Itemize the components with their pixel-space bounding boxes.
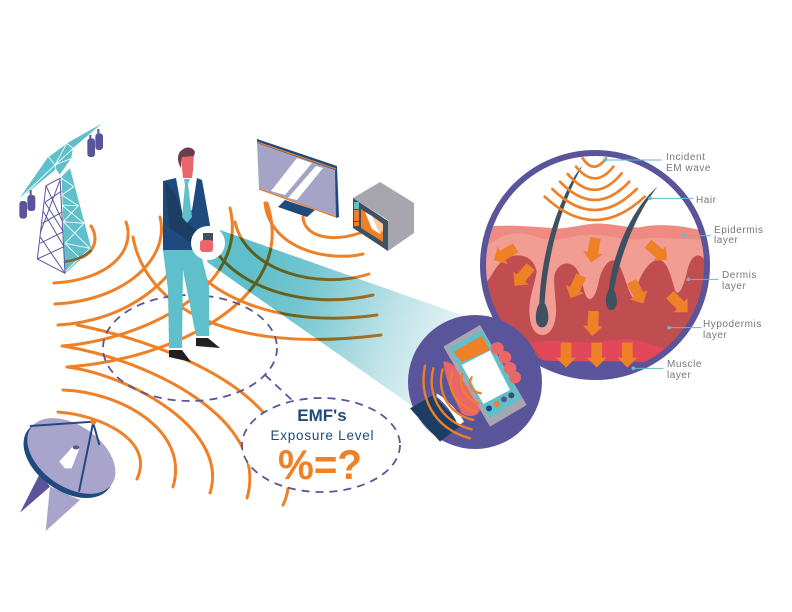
penetration arrows xyxy=(489,236,695,368)
muscle xyxy=(530,339,667,363)
insulators xyxy=(19,129,103,219)
skin labels: layer xyxy=(714,235,739,246)
skin labels: Dermis xyxy=(722,270,757,281)
skin labels: layer xyxy=(722,281,747,292)
fingers xyxy=(491,342,521,383)
callout formula: %=? xyxy=(278,441,362,488)
skin labels: Hypodermis xyxy=(703,319,762,330)
phone xyxy=(443,325,527,427)
hair follicle xyxy=(529,263,556,335)
skin labels: Hair xyxy=(696,195,717,206)
shoes xyxy=(169,350,191,362)
tower body xyxy=(62,168,92,273)
incident wave xyxy=(545,158,645,220)
monitor xyxy=(257,139,339,218)
arm xyxy=(410,395,462,442)
callout heading: EMF's xyxy=(297,406,347,425)
label leaders xyxy=(604,159,718,370)
dashed exposure zone xyxy=(103,295,277,401)
dashed connector xyxy=(265,375,293,401)
lower layer xyxy=(542,360,645,374)
callout subheading: Exposure Level xyxy=(270,428,374,443)
EM wave arcs xyxy=(54,203,381,505)
skin labels: Muscle xyxy=(667,359,702,370)
skin labels xyxy=(666,152,763,381)
trousers xyxy=(163,250,209,348)
head xyxy=(182,153,194,178)
EMF exposure callout xyxy=(242,398,400,492)
tie xyxy=(182,179,192,223)
person with phone xyxy=(163,148,225,362)
skin labels: layer xyxy=(667,370,692,381)
skin labels: EM wave xyxy=(666,163,711,174)
phone detail circle xyxy=(408,315,542,449)
dermis xyxy=(487,255,704,360)
skin labels: Incident xyxy=(666,152,705,163)
satellite dish xyxy=(9,403,129,531)
skin circle xyxy=(483,153,707,377)
hand and phone xyxy=(191,226,225,260)
exposure beam xyxy=(207,230,470,415)
palm xyxy=(443,362,480,416)
epidermis xyxy=(488,224,701,244)
jacket xyxy=(163,178,210,250)
skin labels: layer xyxy=(703,330,728,341)
skin labels: Epidermis xyxy=(714,225,763,236)
transmission tower xyxy=(18,122,104,273)
hairs xyxy=(536,165,583,327)
skin rim xyxy=(483,153,707,377)
microwave xyxy=(353,182,414,251)
phone waves xyxy=(423,366,481,438)
skin cross-section xyxy=(480,153,718,387)
tower lattice xyxy=(37,178,65,273)
